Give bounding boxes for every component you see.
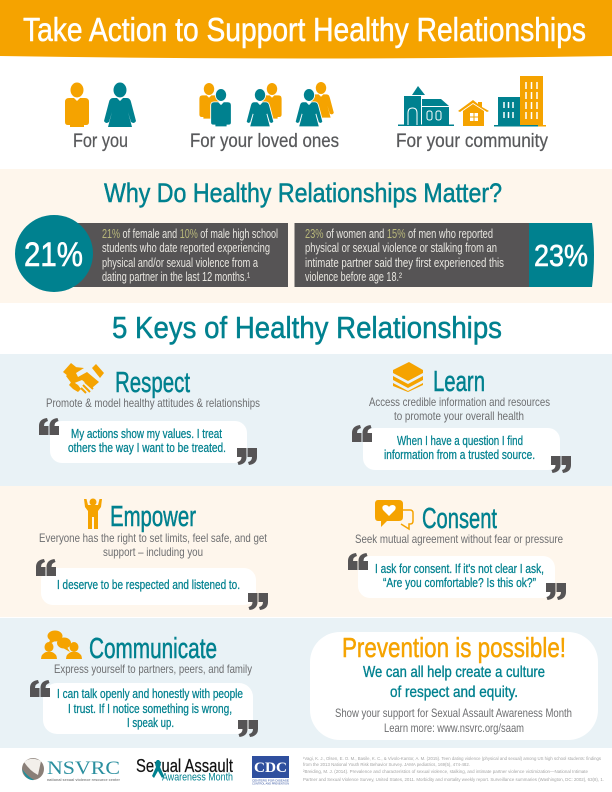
icon: for you <box>65 82 136 127</box>
heading: learn: Learn <box>433 366 485 398</box>
logo: Sexual Assault Awareness Month: Sexual Assault <box>136 756 233 776</box>
panel: why healthy relationships matter <box>0 169 612 303</box>
icon: for your loved ones <box>199 82 334 127</box>
logo: NSVRC <box>22 758 121 782</box>
quote bubble: learn <box>352 425 571 473</box>
stat: 23 percent: physical or sexual violence or stalking from an <box>305 241 497 255</box>
stat: 21 percent <box>15 215 288 292</box>
text: learn more: Learn more: www.nsvrc.org/saam <box>384 721 524 735</box>
heading: communicate: Communicate <box>89 633 217 665</box>
panel: communicate <box>30 630 258 737</box>
text: learn description <box>369 395 550 423</box>
logo: Sexual Assault Awareness Month <box>136 756 233 784</box>
text: call to action: We can all help create a culture <box>363 664 545 681</box>
panel: learn <box>352 362 571 473</box>
logo: CDC: CDC <box>254 760 287 776</box>
text: empower description: Everyone has the right to set limits, feel safe, and get <box>39 531 268 545</box>
references: ²Breiding, M. J. (2014). Prevalence and characteristics of sexual violence, stalking, and intimate partner violence victimization—National Intimate <box>303 769 588 775</box>
quote bubble: learn: When I have a question I find <box>397 434 523 448</box>
references: from the 2013 National Youth Risk Behavior Survey. JAMA pediatrics, 169(5), 474-482. <box>303 762 470 768</box>
text: learn description: to promote your overall health <box>394 409 524 423</box>
stat: 21 percent: students who date reported experiencing <box>102 241 270 255</box>
heading: empower: Empower <box>110 501 196 533</box>
text: call to action: of respect and equity. <box>390 684 518 701</box>
panel: prevention is possible <box>310 632 598 740</box>
heading: respect: Respect <box>115 367 190 399</box>
heading: why: Why Do Healthy Relationships Matter? <box>104 178 502 208</box>
icon: for your community <box>398 76 546 126</box>
text: call to action <box>363 664 545 701</box>
icon: two people talking <box>41 630 82 659</box>
stat: 21 percent: 21% of female and 10% of male high school <box>102 227 278 241</box>
quote bubble: respect: My actions show my values. I treat <box>71 427 222 441</box>
quote bubble: communicate <box>30 680 258 737</box>
label: for you: For you <box>73 131 128 152</box>
panel: respect <box>39 363 260 465</box>
icon: speech bubbles with heart <box>375 500 413 529</box>
quote bubble: learn: information from a trusted source. <box>384 448 535 462</box>
stat: 23 percent: 23% of women and 15% of men who reported <box>305 227 493 241</box>
quote bubble: consent: “Are you comfortable? Is this ok?” <box>383 576 536 590</box>
references <box>303 756 604 783</box>
logo: CDC <box>252 756 289 786</box>
quote bubble: empower <box>36 559 268 610</box>
panel: consent <box>348 500 566 600</box>
section backgrounds <box>0 354 612 748</box>
logo: Sexual Assault Awareness Month: Awareness Month <box>162 772 233 784</box>
stat: 23 percent: violence before age 18.² <box>305 270 402 284</box>
heading: 5 keys: 5 Keys of Healthy Relationships <box>112 310 502 345</box>
text: consent description: Seek mutual agreement without fear or pressure <box>355 532 563 546</box>
quote bubble: empower: I deserve to be respected and listened to. <box>57 578 240 592</box>
logo: CDC: CENTERS FOR DISEASE <box>252 778 289 782</box>
text: respect description: Promote & model healthy attitudes & relationships <box>46 396 260 410</box>
icon: person arms raised <box>84 498 102 529</box>
label: for your loved ones: For your loved ones <box>190 131 339 152</box>
stat: 23 percent: 23% <box>534 238 588 273</box>
logo: NSVRC: NSVRC <box>47 758 120 779</box>
quote bubble: communicate: I trust. If I notice something is wrong, <box>68 702 232 716</box>
stat: 21 percent: 21% <box>24 236 83 274</box>
quote bubble: consent <box>348 553 566 600</box>
stat: 23 percent <box>294 223 594 287</box>
quote bubble: communicate: I speak up. <box>127 716 174 730</box>
heading: consent: Consent <box>422 503 497 535</box>
logo: NSVRC: national sexual violence resource center <box>47 778 121 782</box>
label: for your community: For your community <box>396 131 548 152</box>
text: communicate description: Express yourself to partners, peers, and family <box>54 662 252 676</box>
quote bubble: respect <box>39 418 257 465</box>
quote bubble: respect: others the way I want to be treated. <box>68 441 226 455</box>
quote bubble: consent: I ask for consent. If it's not clear I ask, <box>375 562 544 576</box>
text: empower description <box>39 531 268 559</box>
text: empower description: support – including you <box>103 545 203 559</box>
stat: 23 percent: intimate partner said they first experienced this <box>305 256 504 270</box>
text: learn description: Access credible information and resources <box>369 395 550 409</box>
text: learn more <box>335 706 572 735</box>
stat: 21 percent: dating partner in the last 12 months.¹ <box>102 270 250 284</box>
icon: handshake <box>63 363 104 393</box>
quote bubble: communicate: I can talk openly and honestly with people <box>57 687 243 701</box>
stat: 21 percent: physical and/or sexual violence from a <box>102 256 258 270</box>
panel: empower <box>36 498 268 610</box>
header banner <box>0 0 612 58</box>
icon: books <box>393 362 423 392</box>
logo: CDC: CONTROL AND PREVENTION <box>252 782 289 786</box>
